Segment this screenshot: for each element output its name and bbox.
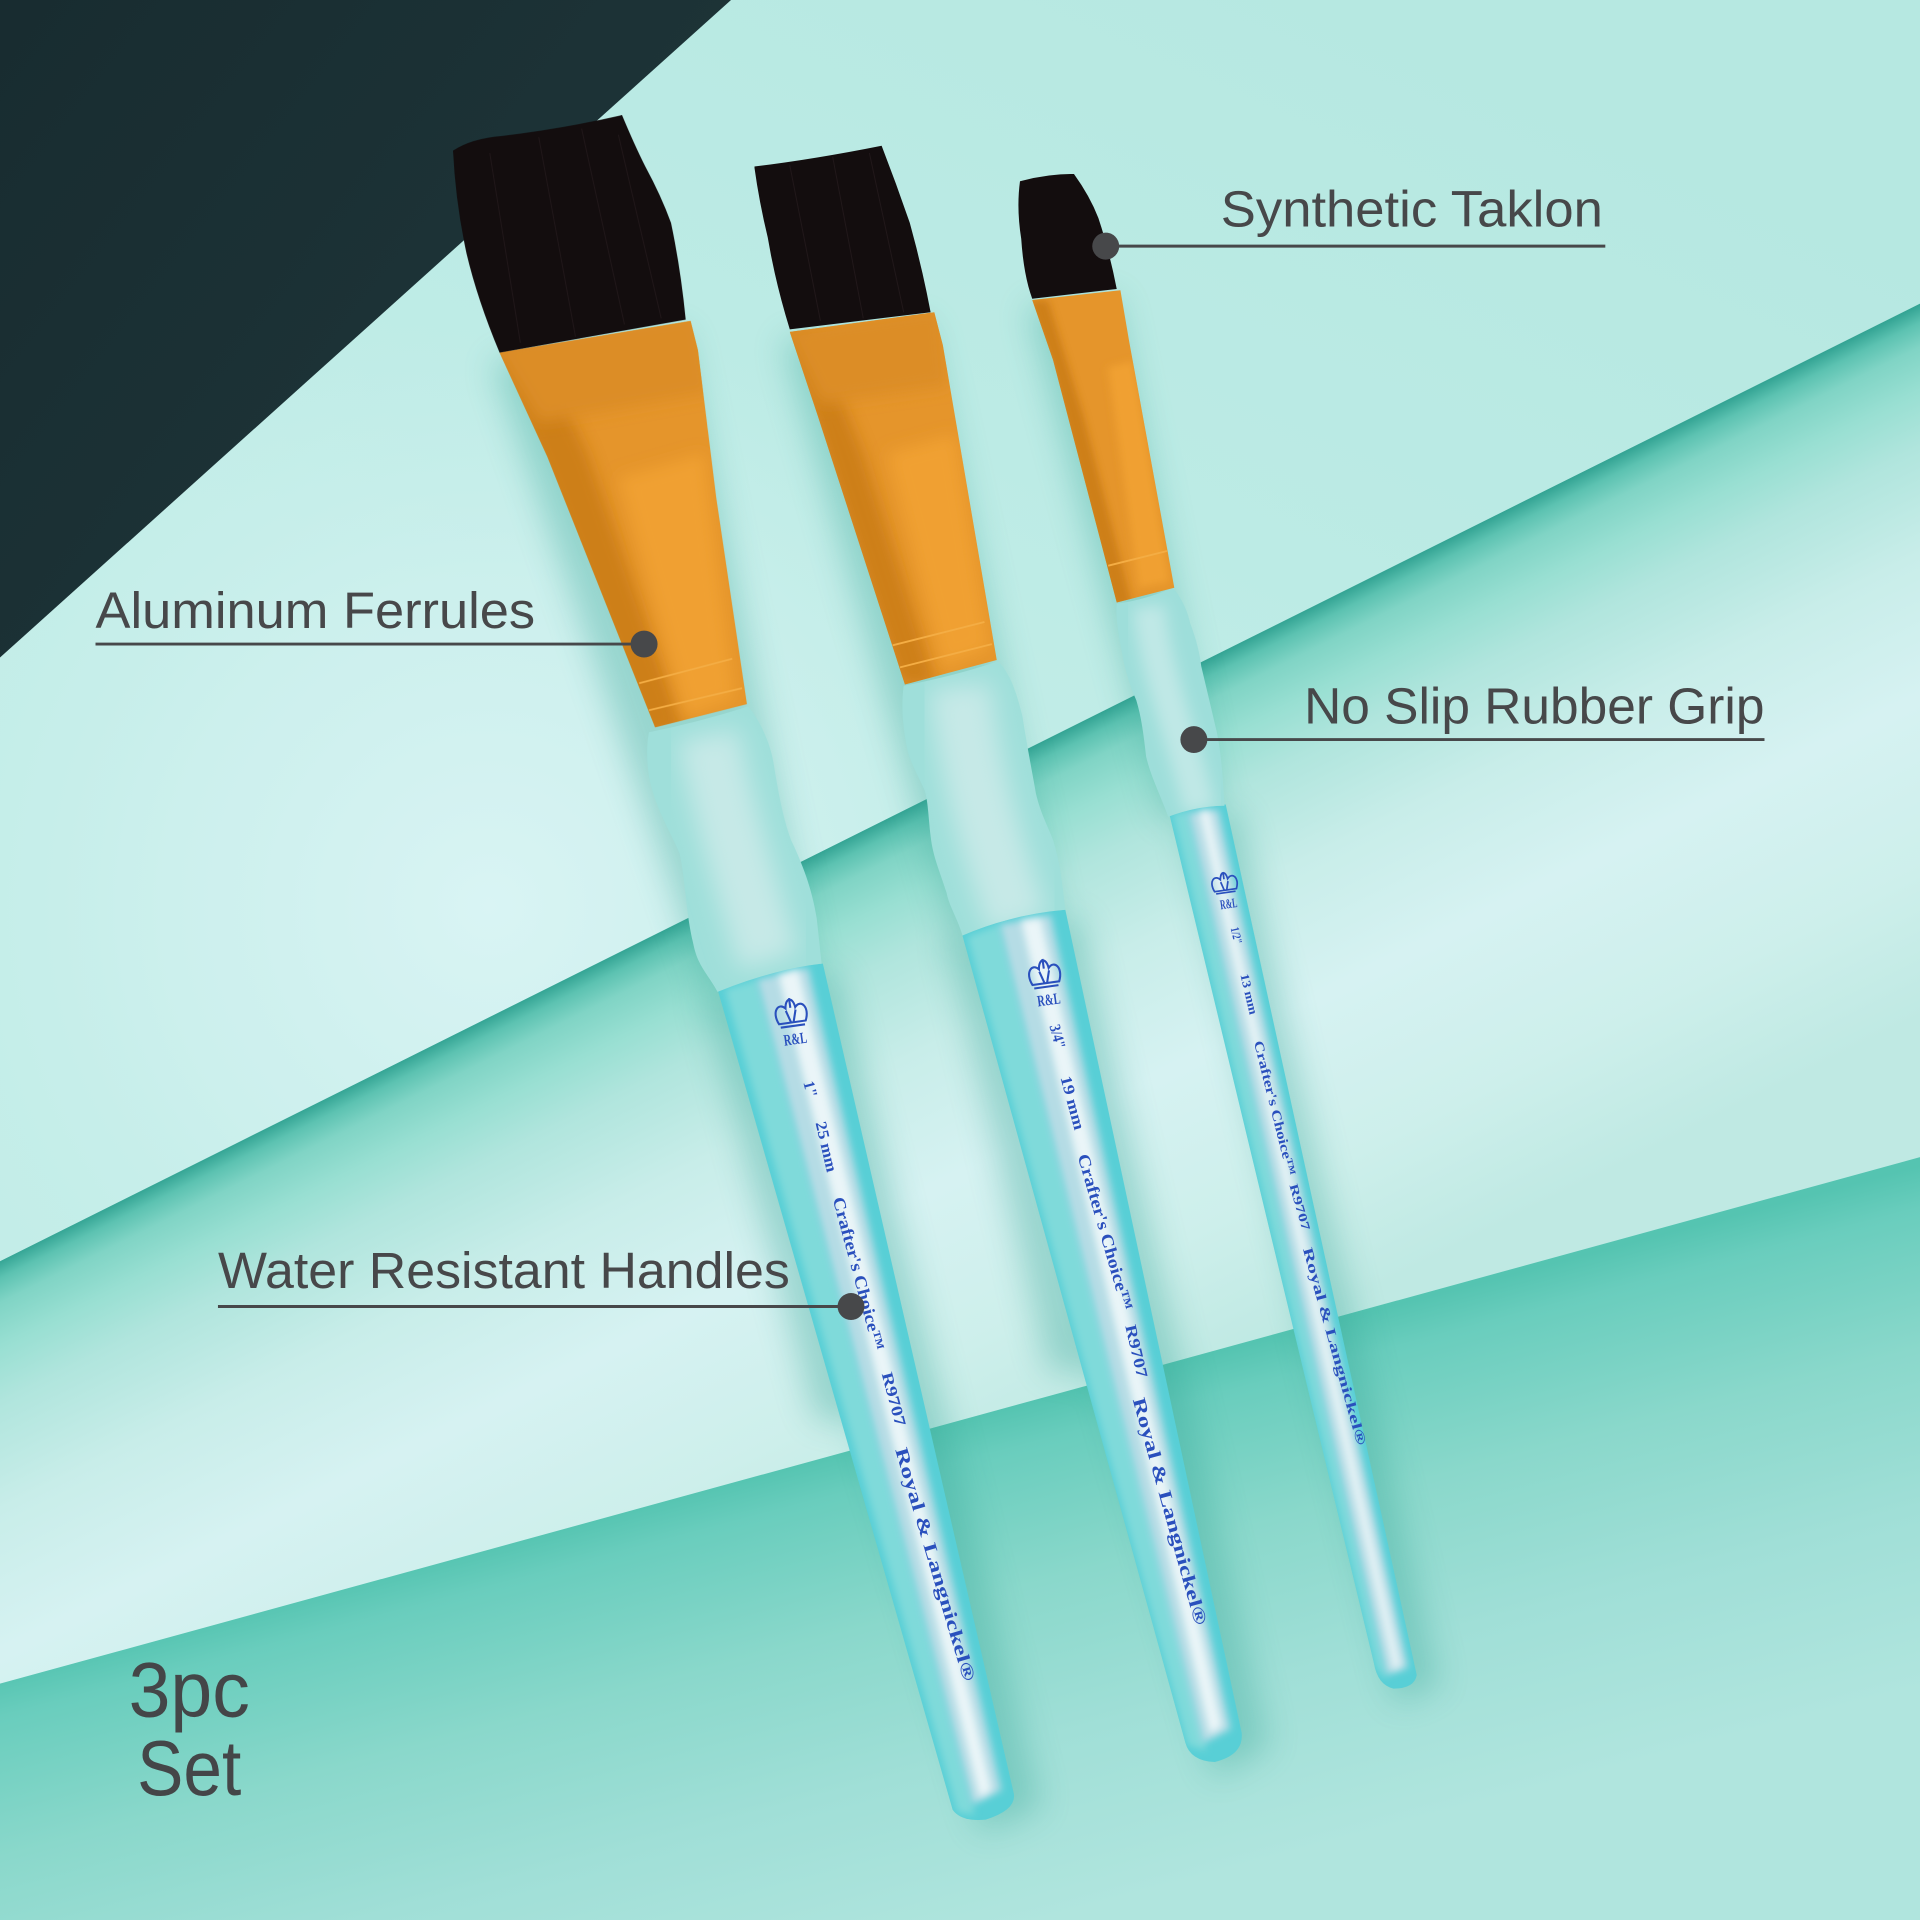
bristles 1 (453, 115, 686, 353)
dark corner panel (0, 0, 731, 658)
imprint 1 (799, 1079, 979, 1684)
callout: No Slip Rubber Grip (1180, 677, 1764, 753)
imprint 2: Royal & Langnickel® (1129, 1395, 1211, 1628)
callout: Aluminum Ferrules: Aluminum Ferrules (96, 581, 535, 639)
imprint 2: R9707 (1121, 1323, 1150, 1380)
callout: Water Resistant Handles: Water Resistant Handles (218, 1241, 790, 1299)
imprint 3: R9707 (1287, 1182, 1313, 1232)
set size label: 3pc (129, 1646, 250, 1734)
set size label: Set (137, 1724, 241, 1812)
logo 1: R&L (783, 1030, 808, 1050)
callout: Aluminum Ferrules (96, 581, 658, 658)
imprint 2: Crafter's Choice™ (1074, 1152, 1137, 1312)
imprint 2: 3/4" (1046, 1023, 1068, 1051)
imprint 3: 1/2" (1228, 926, 1245, 946)
brush 3: 1/2 inch (1018, 174, 1417, 1689)
set size label (129, 1646, 250, 1812)
logo 1 (774, 996, 811, 1050)
imprint 3: Royal & Langnickel® (1299, 1246, 1369, 1448)
brush shadows (492, 298, 1439, 1832)
handle 1 (718, 964, 1014, 1820)
middle paper sheet (0, 304, 1920, 1684)
handle 3 (1169, 804, 1417, 1689)
brush 2: 3/4 inch (754, 146, 1242, 1762)
imprint 3: 13 mm (1237, 972, 1260, 1016)
imprint 1: 25 mm (812, 1120, 840, 1174)
imprint 1: Royal & Langnickel® (891, 1445, 979, 1684)
bristles 2 (754, 146, 931, 329)
imprint 1: 1" (799, 1079, 820, 1100)
grip 3 (1116, 588, 1224, 817)
bottom paper sheet (0, 1157, 1920, 1920)
top paper sheet (0, 0, 1920, 1261)
imprint 2 (1046, 1023, 1211, 1628)
callout: No Slip Rubber Grip: No Slip Rubber Grip (1304, 677, 1764, 735)
callout: Synthetic Taklon: Synthetic Taklon (1221, 180, 1603, 238)
logo 3: R&L (1219, 895, 1238, 912)
logo 2 (1027, 957, 1065, 1011)
grip 1 (647, 707, 822, 992)
imprint 2: 19 mm (1057, 1074, 1087, 1132)
ferrule 3 (1029, 290, 1174, 606)
bristles 3 (1018, 174, 1117, 299)
imprint 3: Crafter's Choice™ (1251, 1039, 1299, 1177)
logo 2: R&L (1036, 990, 1062, 1010)
grip 2 (902, 661, 1065, 936)
imprint 1: Crafter's Choice™ (829, 1195, 888, 1352)
ferrule 2 (784, 306, 997, 686)
callout: Synthetic Taklon (1092, 180, 1605, 260)
logo 3 (1210, 870, 1241, 913)
imprint 1: R9707 (878, 1371, 908, 1428)
ferrule 1 (490, 312, 747, 735)
brush 1: 1 inch (453, 115, 1014, 1820)
imprint 3 (1228, 926, 1369, 1448)
handle 2 (962, 910, 1242, 1762)
callout: Water Resistant Handles (218, 1241, 864, 1320)
